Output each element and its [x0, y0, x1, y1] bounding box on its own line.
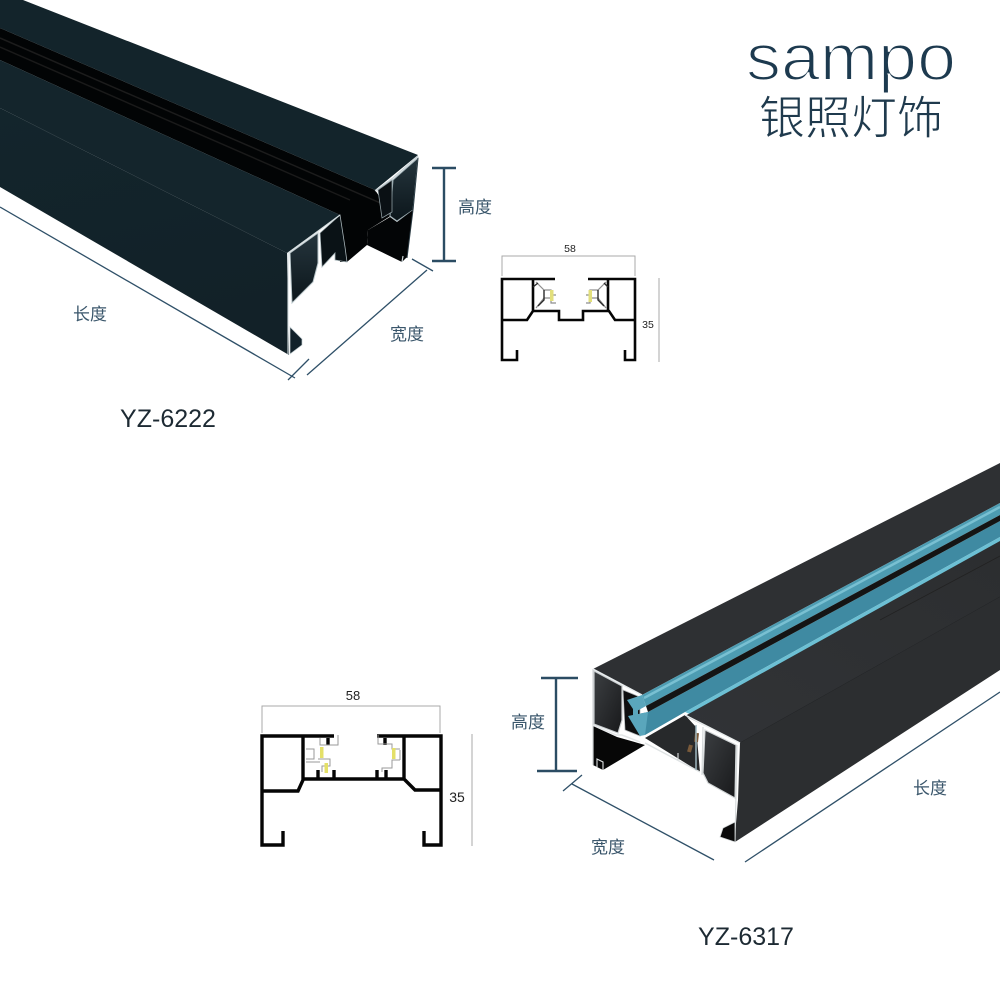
left end profile — [290, 233, 318, 303]
cross-section drawing: YZ-6222 — [502, 243, 659, 362]
connector inserts — [306, 735, 400, 772]
teal upper rail — [642, 503, 1000, 706]
cross-section drawing: YZ-6317 — [262, 688, 472, 846]
left box profile — [594, 671, 622, 733]
height dimension: YZ-6222 — [432, 168, 456, 261]
centre channel — [0, 28, 392, 262]
right box profile — [703, 730, 736, 798]
length dimension: YZ-6317 — [745, 692, 1000, 862]
brand logo — [746, 20, 956, 144]
dimension lines — [262, 706, 472, 846]
dimension 58: 58 — [564, 243, 576, 255]
label: width: 宽度 — [591, 838, 625, 857]
dimension lines — [502, 256, 659, 362]
front top surface — [685, 541, 1000, 743]
front top surface — [0, 60, 340, 253]
width dimension: YZ-6222 — [288, 259, 433, 380]
teal lower rail — [628, 521, 1000, 735]
connector slot — [623, 690, 640, 736]
logo chinese name: 银照灯饰 — [759, 92, 943, 144]
section outline — [502, 279, 635, 360]
groove — [646, 515, 1000, 712]
label: height: 高度 — [511, 713, 545, 732]
label: height: 高度 — [458, 198, 492, 217]
dimension 35: 35 — [642, 319, 654, 331]
product photo: YZ-6317 rail — [593, 463, 1000, 842]
height dimension: YZ-6317 — [537, 678, 578, 771]
copper conductors — [320, 747, 324, 758]
model name: YZ-6222: YZ-6222 — [120, 405, 216, 433]
teal thin edge — [685, 537, 1000, 715]
model name: YZ-6317: YZ-6317 — [698, 923, 794, 951]
dimension 58: 58 — [346, 688, 360, 703]
label: width: 宽度 — [390, 325, 424, 344]
teal connector end — [627, 695, 648, 736]
rear top surface — [593, 463, 1000, 695]
dimension 35: 35 — [449, 789, 465, 805]
section outline — [262, 736, 441, 845]
right end profile — [390, 158, 418, 221]
rear top surface — [0, 0, 418, 190]
copper connector — [689, 733, 697, 752]
label: length: 长度 — [73, 305, 107, 324]
inner floor — [645, 715, 700, 772]
side face — [735, 597, 1000, 842]
copper conductors — [550, 290, 554, 301]
logo wordmark: sampo — [746, 20, 956, 94]
connector inserts — [536, 282, 606, 308]
length dimension: YZ-6222 — [0, 207, 295, 378]
product photo: YZ-6222 rail — [0, 0, 418, 355]
side face — [0, 108, 289, 355]
width dimension: YZ-6317 — [563, 775, 714, 860]
label: length: 长度 — [913, 779, 947, 798]
